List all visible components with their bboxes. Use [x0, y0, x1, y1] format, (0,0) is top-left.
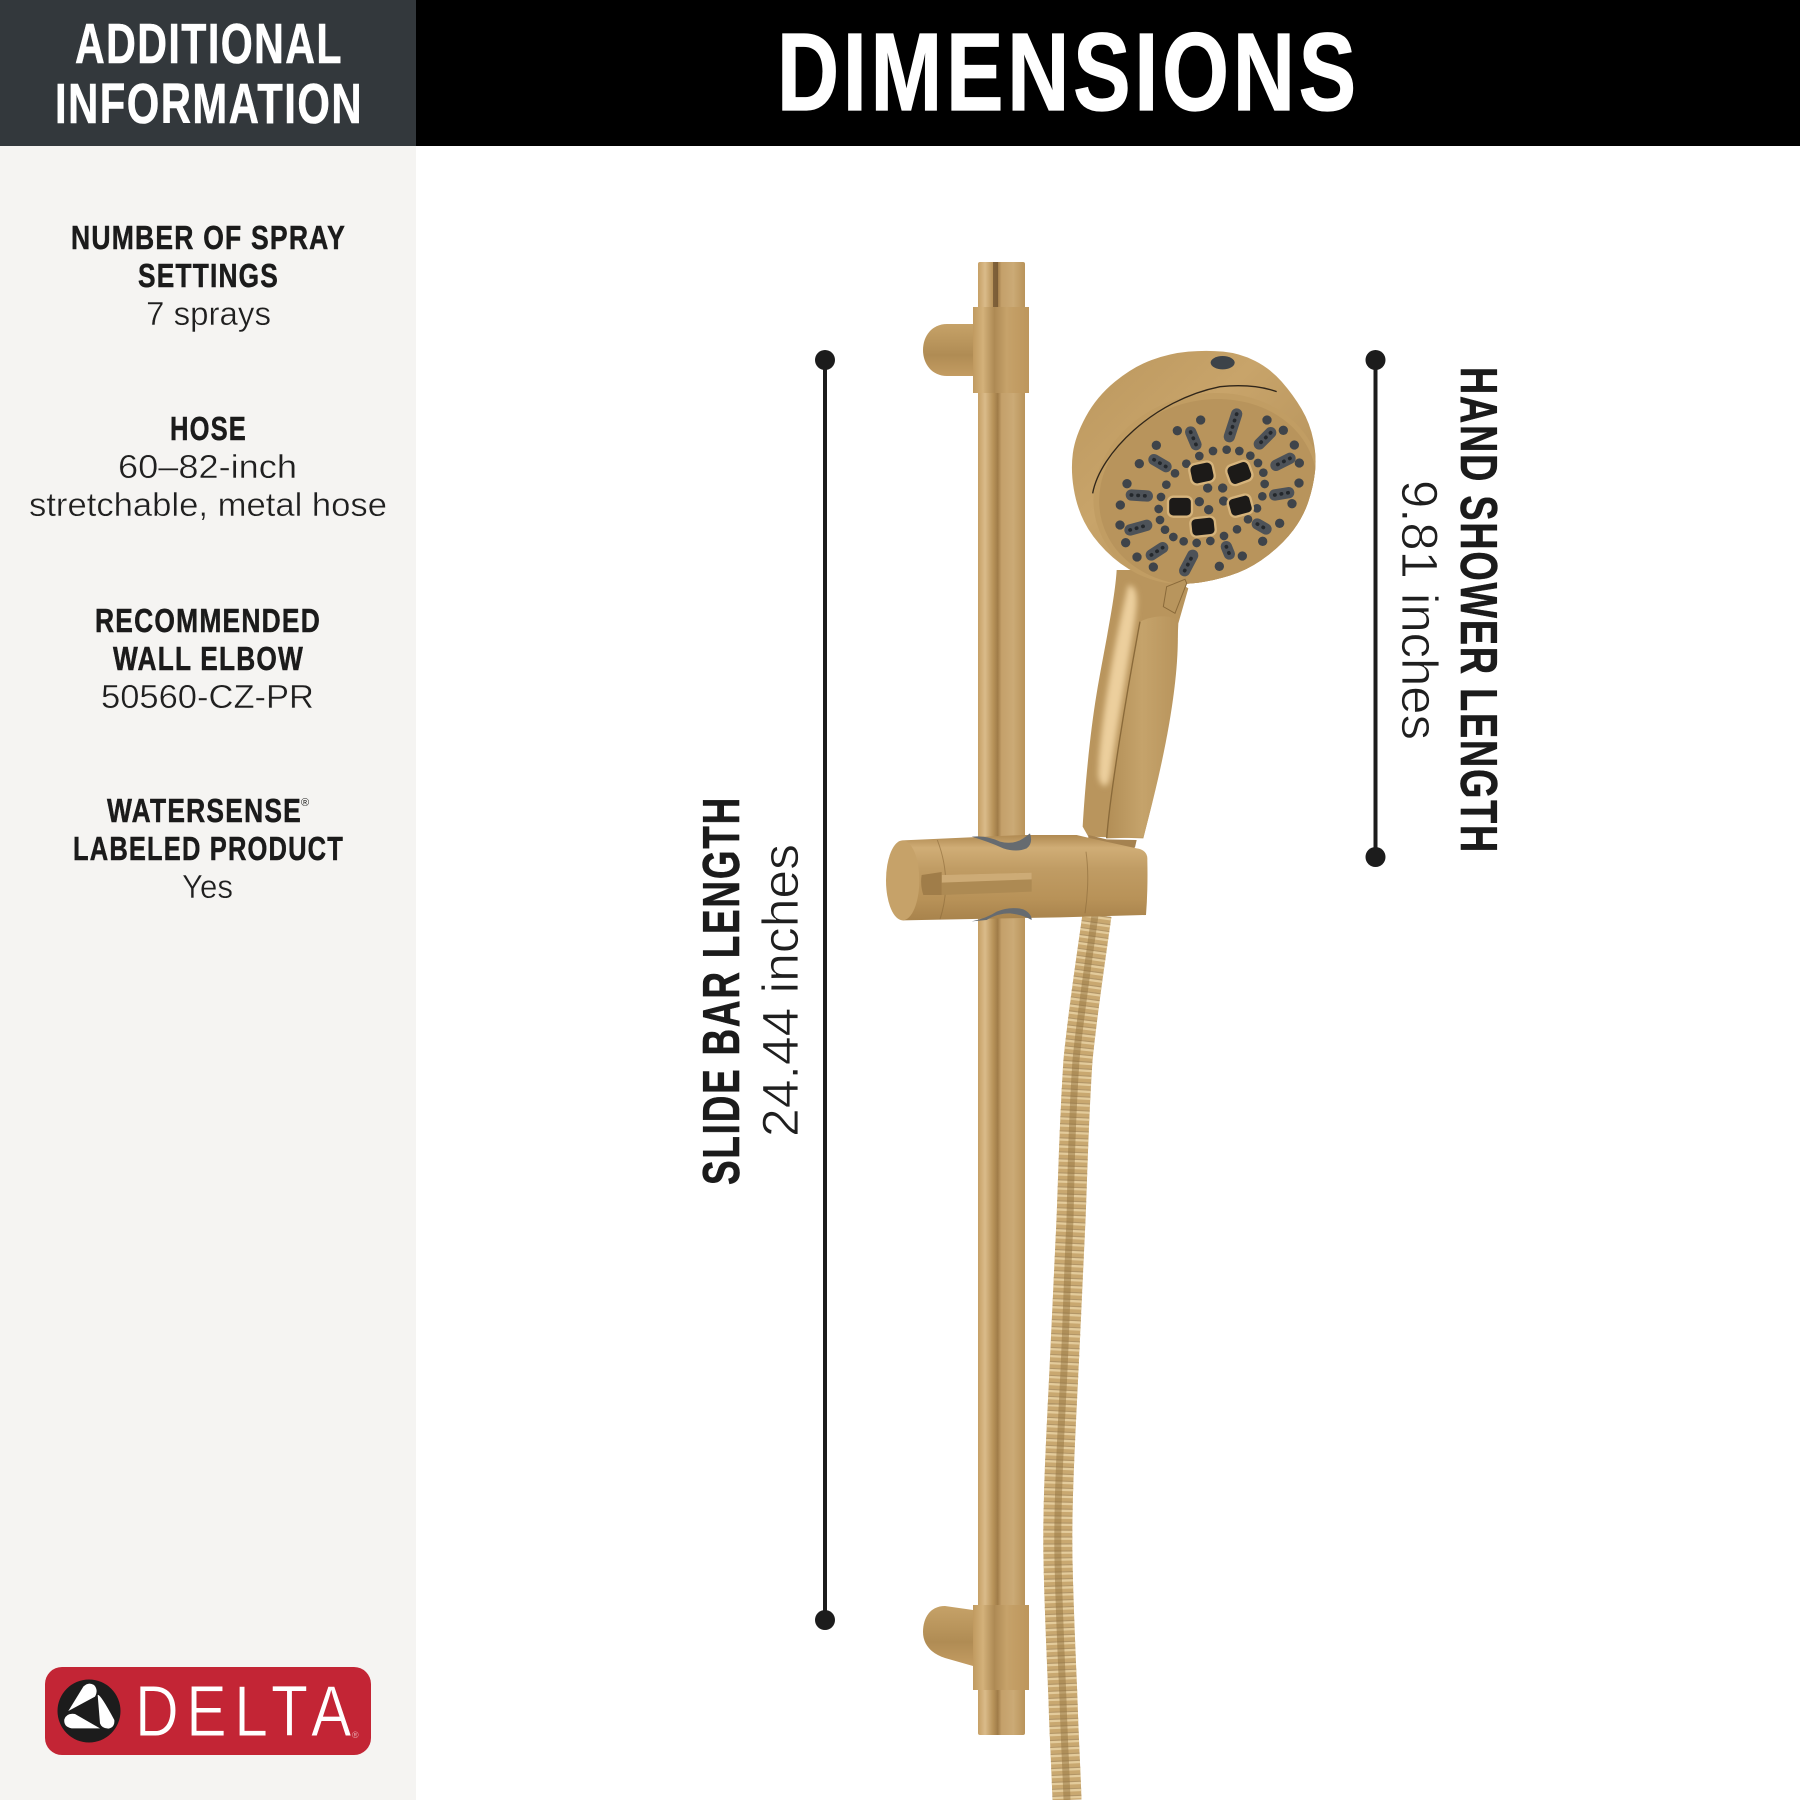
logo: delta — [45, 1667, 371, 1755]
grip highlight — [1098, 585, 1137, 786]
spec: recommended wall elbow: WALL ELBOW — [113, 640, 304, 677]
top wall bracket — [923, 307, 1029, 393]
top bar shadow strip — [993, 262, 998, 392]
trigger detail — [1163, 579, 1187, 613]
jet openings — [1168, 459, 1254, 537]
top release button — [1211, 356, 1235, 369]
logo: delta: ® — [352, 1730, 359, 1740]
spec: watersense labeled product: Yes — [182, 868, 233, 905]
spec: watersense labeled product: ® — [301, 797, 309, 809]
slider clips — [972, 833, 1031, 850]
slider button — [921, 872, 1032, 895]
slide bar — [923, 262, 1029, 1735]
dimension: slide bar length: SLIDE BAR LENGTH — [693, 796, 751, 1185]
dimension: hand shower length — [1366, 350, 1507, 867]
header: additional information: ADDITIONAL — [75, 12, 343, 76]
grip front panel — [1107, 616, 1178, 838]
logo: delta: DELTA — [135, 1672, 359, 1752]
spec: recommended wall elbow: RECOMMENDED — [95, 602, 321, 639]
slider bracket — [886, 833, 1147, 921]
slot jets — [1130, 414, 1290, 571]
spec: hose: HOSE — [170, 410, 247, 447]
spec: number of spray settings — [71, 219, 346, 332]
spec: recommended wall elbow — [95, 602, 321, 715]
spec: number of spray settings: 7 sprays — [146, 295, 271, 332]
spray face — [1099, 399, 1316, 584]
bottom wall bracket — [923, 1605, 1029, 1690]
hose — [1058, 915, 1097, 1800]
dimension: slide bar length: 24.44 inches — [752, 844, 809, 1137]
spec: watersense labeled product: LABELED PRODUCT — [73, 830, 344, 867]
spray slots — [1130, 414, 1290, 571]
header: dimensions title — [416, 0, 1800, 146]
spec: recommended wall elbow: 50560-CZ-PR — [101, 678, 314, 715]
shower head — [1072, 350, 1316, 614]
dimension: hand shower length: 9.81 inches — [1391, 480, 1448, 740]
sidebar panel background — [0, 146, 416, 1800]
spec: hose: stretchable, metal hose — [29, 486, 387, 523]
spec: hose: 60–82-inch — [118, 448, 297, 485]
dimension: slide bar length — [693, 350, 835, 1630]
hand shower handle — [1083, 570, 1188, 853]
spec: number of spray settings: NUMBER OF SPRAY — [71, 219, 346, 256]
header: dimensions title: DIMENSIONS — [777, 11, 1360, 134]
spec: watersense labeled product: WATERSENSE — [107, 792, 302, 829]
spray nozzles — [1115, 415, 1304, 572]
header: additional information — [0, 0, 416, 146]
spec: hose — [29, 410, 387, 523]
handle neck collar — [1088, 835, 1137, 853]
header: additional information: INFORMATION — [55, 72, 363, 136]
spec: number of spray settings: SETTINGS — [138, 257, 279, 294]
dimension: hand shower length: HAND SHOWER LENGTH — [1449, 367, 1507, 854]
spec: watersense labeled product — [73, 792, 344, 905]
